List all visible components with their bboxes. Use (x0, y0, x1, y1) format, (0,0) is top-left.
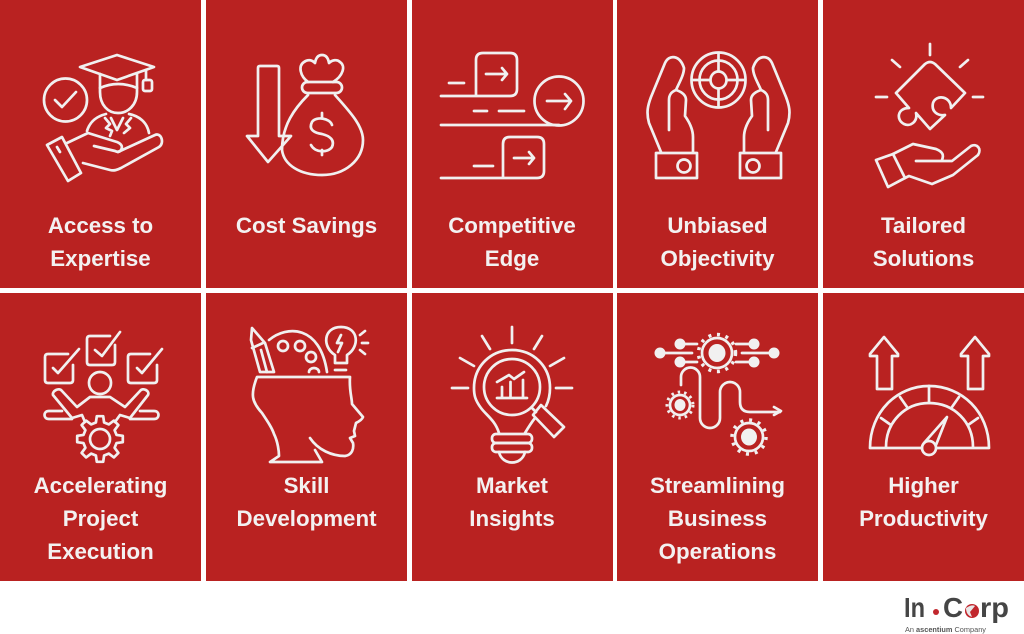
heading: streamlining business operations: Streamlining (650, 473, 785, 498)
icon: open head with pencil, palette and bulb (251, 327, 368, 462)
logo: InCorp: An ascentium Company (905, 625, 986, 634)
heading: streamlining business operations: Business (668, 506, 767, 531)
panel: unbiased objectivity (617, 0, 818, 288)
heading: access to expertise: Access to (48, 213, 153, 238)
heading: streamlining business operations: Operations (659, 539, 776, 564)
icon: gears and flow line (665, 334, 781, 454)
heading: market insights: Market (476, 473, 548, 498)
heading: market insights: Insights (469, 506, 555, 531)
heading: tailored solutions: Tailored (881, 213, 966, 238)
icon: filled gear centres and nodes (654, 338, 780, 446)
heading: accelerating project execution: Execution (47, 539, 154, 564)
icon: target between hands (648, 52, 789, 178)
logo: InCorp: C (943, 592, 963, 623)
panel: cost savings (206, 0, 407, 288)
heading: access to expertise: Expertise (50, 246, 151, 271)
heading: higher productivity: Productivity (859, 506, 989, 531)
panel: streamlining business operations (617, 293, 818, 581)
heading: skill development: Development (236, 506, 377, 531)
heading: competitive edge: Edge (485, 246, 539, 271)
panel: tailored solutions (823, 0, 1024, 288)
icon: person juggling checkboxes above gear (44, 332, 162, 462)
logo: InCorp (904, 592, 1009, 634)
icon: graduate on hand (44, 55, 162, 181)
heading: unbiased objectivity: Unbiased (667, 213, 768, 238)
heading: tailored solutions: Solutions (873, 246, 974, 271)
icon: money bag with down arrow (247, 55, 363, 175)
heading: cost savings: Cost Savings (236, 213, 377, 238)
icon: puzzle piece over hand (876, 44, 983, 187)
logo: InCorp: In (904, 592, 925, 623)
heading: competitive edge: Competitive (448, 213, 576, 238)
heading: accelerating project execution: Project (63, 506, 139, 531)
icon: boxes on moving lines (441, 53, 584, 178)
logo: InCorp: rp (980, 592, 1009, 623)
heading: higher productivity: Higher (888, 473, 959, 498)
panel: competitive edge (412, 0, 613, 288)
panel: accelerating project execution (0, 293, 201, 581)
icon: speedometer with up arrows (870, 337, 989, 455)
panel: skill development (206, 293, 407, 581)
panel: access to expertise (0, 0, 201, 288)
icon: light bulb with magnifier (452, 327, 572, 462)
heading: accelerating project execution: Accelerating (34, 473, 167, 498)
heading: skill development: Skill (284, 473, 329, 498)
panel: market insights (412, 293, 613, 581)
heading: unbiased objectivity: Objectivity (660, 246, 775, 271)
panel: higher productivity (823, 293, 1024, 581)
